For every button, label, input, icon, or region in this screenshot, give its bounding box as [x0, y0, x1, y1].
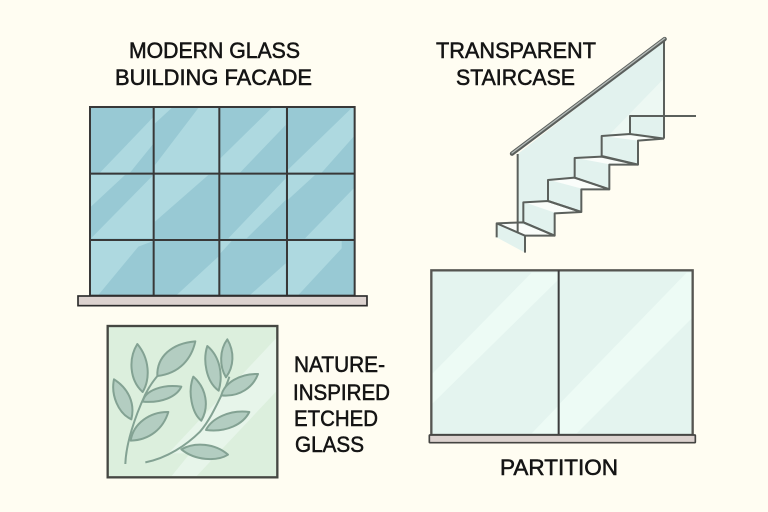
label: partition: PARTITION [500, 455, 618, 480]
label: nature-inspired etched glass: ETCHED [294, 406, 378, 431]
handrail [512, 39, 665, 154]
title: modern glass building facade [115, 38, 312, 90]
facade base ledge [78, 296, 367, 306]
panel: nature-inspired etched glass [108, 326, 277, 477]
label: nature-inspired etched glass: INSPIRED [293, 380, 390, 405]
illustration: glass staircase [497, 38, 696, 253]
panel: glass partition [429, 270, 695, 443]
left sprig stems [125, 373, 160, 464]
panel: glass facade [78, 107, 367, 306]
title: transparent staircase: STAIRCASE [456, 65, 575, 90]
label: nature-inspired etched glass [293, 352, 390, 457]
label: nature-inspired etched glass: GLASS [295, 432, 364, 457]
label: nature-inspired etched glass: NATURE- [294, 352, 385, 377]
title: modern glass building facade: MODERN GLASS [129, 38, 300, 63]
partition base ledge [429, 435, 695, 443]
title: transparent staircase [436, 38, 596, 90]
title: modern glass building facade: BUILDING FACADE [115, 65, 312, 90]
title: transparent staircase: TRANSPARENT [436, 38, 596, 63]
right sprig stems [145, 377, 229, 462]
